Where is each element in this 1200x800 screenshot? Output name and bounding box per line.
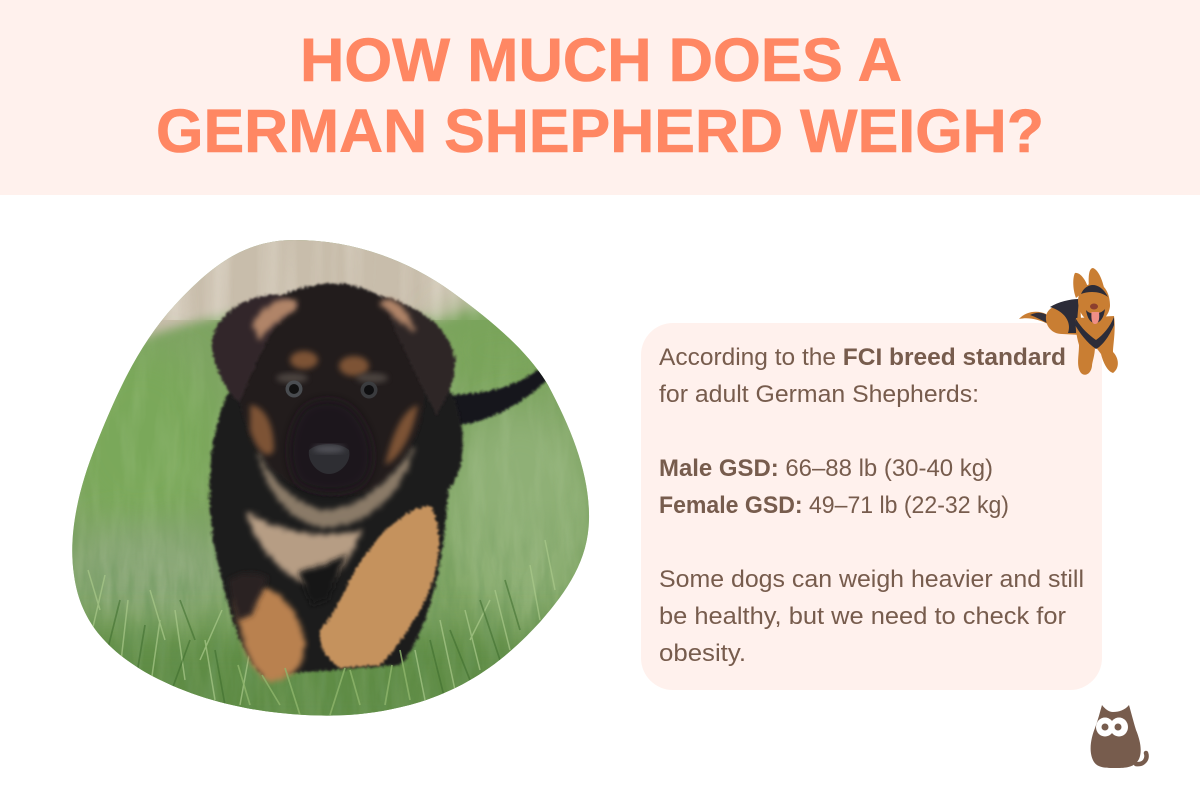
panel text: According to the FCI breed standard — [659, 344, 1066, 371]
panel text: Some dogs can weigh heavier and still — [659, 566, 1084, 593]
chest and legs — [1076, 316, 1118, 375]
harness — [1075, 317, 1114, 349]
eyes — [286, 380, 302, 398]
eye surrounds — [276, 373, 388, 383]
title — [156, 26, 1044, 165]
title banner — [0, 0, 1200, 195]
blurred background tones — [146, 240, 476, 343]
muzzle — [292, 404, 369, 489]
panel text: Male GSD: 66–88 lb (30-40 kg) — [659, 455, 993, 482]
nose — [309, 444, 349, 474]
brow and cheek markings — [250, 351, 418, 465]
mouth and tongue — [1086, 309, 1105, 323]
title: GERMAN SHEPHERD WEIGH? — [156, 97, 1044, 165]
photo: German Shepherd puppy in grass — [72, 240, 590, 716]
cat eyes — [1096, 718, 1114, 736]
text panel — [641, 323, 1102, 690]
panel text: Female GSD: 49–71 lb (22-32 kg) — [659, 492, 1009, 519]
foreground grass — [238, 650, 410, 715]
panel text: obesity. — [659, 640, 746, 667]
head — [266, 281, 404, 346]
tail — [1019, 312, 1048, 324]
raised front leg — [320, 505, 439, 668]
ears — [1073, 273, 1088, 298]
grass blades — [88, 540, 555, 705]
title: HOW MUCH DOES A — [300, 26, 902, 94]
tail — [450, 368, 546, 426]
cat tail — [1136, 753, 1147, 764]
haunch and back — [1046, 302, 1082, 335]
left leg — [236, 588, 305, 682]
chest fur — [246, 510, 362, 590]
left ear — [210, 292, 286, 402]
panel text: be healthy, but we need to check for — [659, 603, 1066, 630]
panel text: for adult German Shepherds: — [659, 381, 979, 408]
face ruff — [258, 445, 415, 528]
panel text — [659, 344, 1084, 667]
icon: brown cat logo — [1091, 705, 1147, 768]
right ear — [380, 295, 455, 415]
head — [1078, 283, 1110, 322]
icon: cartoon German Shepherd — [1019, 268, 1118, 375]
puppy body — [206, 389, 465, 676]
